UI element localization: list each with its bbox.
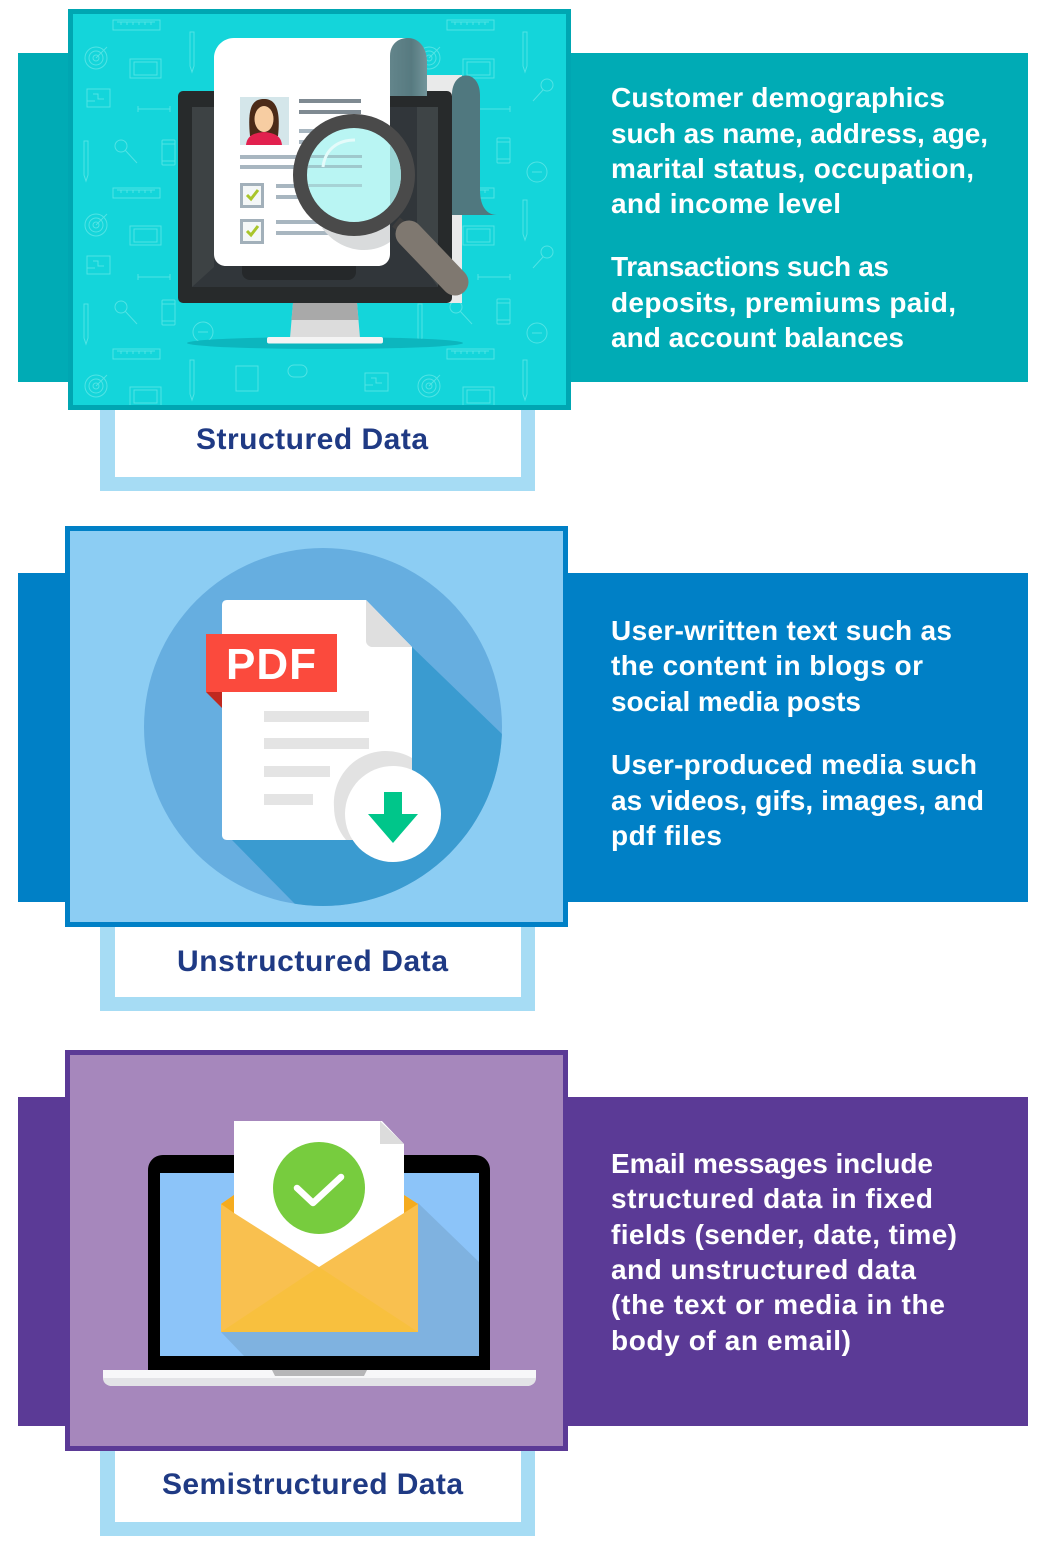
text: structured data details: and account balances	[611, 322, 904, 353]
label box: structured data: Structured Data	[196, 423, 428, 456]
stand	[290, 303, 360, 338]
text: unstructured data details	[611, 615, 984, 851]
text: structured data details: marital status, occupation,	[611, 153, 974, 184]
text: structured data details: Customer demographics	[611, 82, 945, 113]
text: structured data details: deposits, premiums paid,	[611, 287, 956, 318]
text: semistructured data details: and unstructured data	[611, 1254, 916, 1285]
text: semistructured data details: (the text or media in the	[611, 1289, 945, 1320]
monitor	[178, 91, 452, 303]
label box: structured data	[100, 400, 535, 491]
icon: monitor with resume and magnifier	[178, 38, 497, 349]
illustration frame	[68, 9, 571, 410]
illustration frame	[68, 1052, 566, 1448]
resume page	[214, 38, 406, 266]
check badge	[273, 1142, 365, 1234]
icon: laptop with email	[103, 1121, 536, 1386]
label box: unstructured data: Unstructured Data	[177, 945, 448, 978]
text: unstructured data details: pdf files	[611, 820, 722, 851]
text: structured data details: and income level	[611, 188, 841, 219]
document	[222, 600, 412, 840]
blue band	[18, 573, 1028, 902]
magnifier	[300, 120, 455, 282]
text: structured data details: Transactions such as	[611, 251, 889, 282]
label box: semistructured data	[100, 1445, 535, 1536]
text: unstructured data details: social media posts	[611, 686, 861, 717]
download button	[334, 751, 441, 862]
back paper	[427, 75, 462, 303]
text: structured data details	[611, 82, 988, 353]
text: unstructured data details: User-written text such as	[611, 615, 952, 646]
text: structured data details: such as name, address, age,	[611, 118, 988, 149]
purple band	[18, 1097, 1028, 1426]
illustration frame	[68, 528, 566, 924]
label box: semistructured data: Semistructured Data	[162, 1468, 463, 1501]
laptop	[148, 1155, 490, 1370]
front paper curl	[388, 38, 427, 96]
text: semistructured data details	[611, 1148, 957, 1356]
pdf tag: PDF	[226, 640, 316, 689]
icon: pdf download	[144, 548, 502, 906]
text: semistructured data details: structured data in fixed	[611, 1183, 933, 1214]
text: unstructured data details: as videos, gifs, images, and	[611, 785, 984, 816]
text: unstructured data details: the content in blogs or	[611, 650, 923, 681]
label box: unstructured data	[100, 920, 535, 1011]
panel: semistructured data	[18, 1052, 1028, 1536]
text: semistructured data details: body of an email)	[611, 1325, 851, 1356]
panel: unstructured data	[18, 528, 1028, 1011]
panel: structured data	[18, 9, 1028, 491]
text: semistructured data details: Email messages include	[611, 1148, 933, 1179]
envelope	[221, 1195, 418, 1332]
pdf tag	[206, 634, 337, 708]
letter	[234, 1121, 404, 1267]
text: semistructured data details: fields (sender, date, time)	[611, 1219, 957, 1250]
teal band	[18, 53, 1028, 382]
text: unstructured data details: User-produced media such	[611, 749, 977, 780]
